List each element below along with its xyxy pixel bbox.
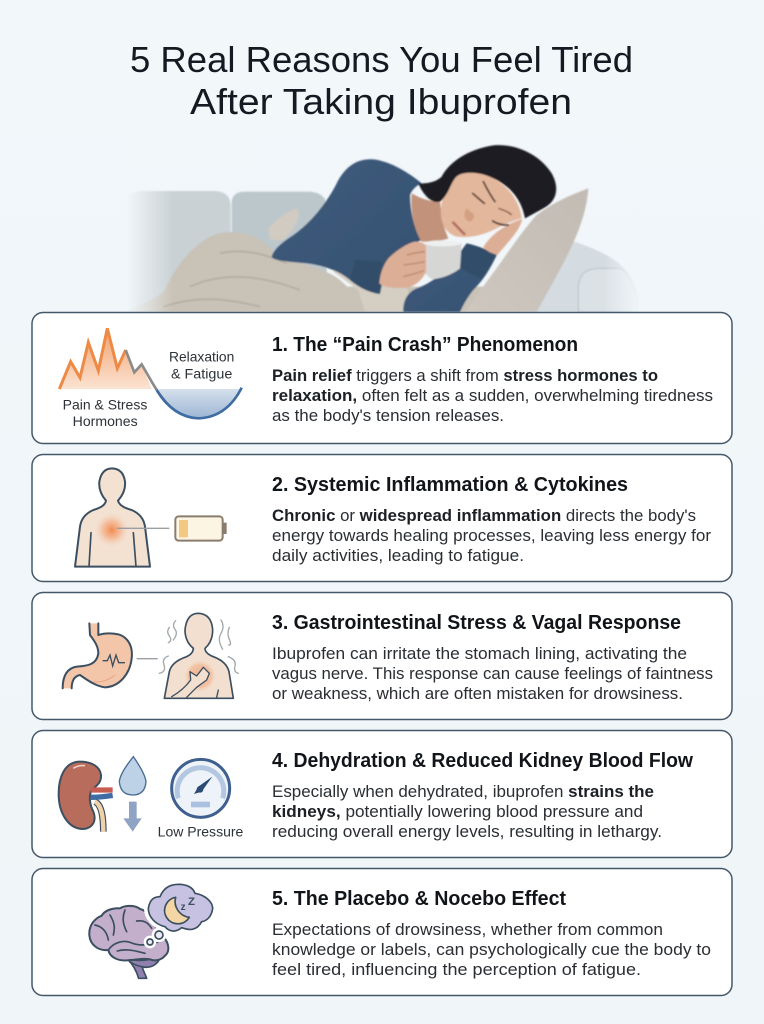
heading 2: 2. Systemic Inflammation & Cytokines [272,474,628,496]
body 3 [272,645,713,703]
icon: pain crash chart: & Fatigue [171,365,233,381]
icon: kidney, water drop, arrow and pressure gauge [59,757,244,840]
body 4: kidneys, potentially lowering blood pressure and [272,803,643,821]
body 5: knowledge or labels, can psychologically cue the body to [272,941,711,959]
icon: pain crash chart: Pain & Stress [63,396,147,412]
body 3: Ibuprofen can irritate the stomach lining, activating the [272,645,687,663]
title [130,39,633,122]
heading 4: 4. Dehydration & Reduced Kidney Blood Flow [272,750,693,772]
body 2 [272,507,712,565]
icon: pain crash chart [59,328,242,429]
title: After Taking Ibuprofen [190,81,572,122]
heading 3: 3. Gastrointestinal Stress & Vagal Response [272,612,681,634]
heading 5: 5. The Placebo & Nocebo Effect [272,888,566,910]
icon: brain with sleep thought bubble [89,884,213,978]
icon: kidney, water drop, arrow and pressure gauge: Low Pressure [158,824,244,840]
body 4: Especially when dehydrated, ibuprofen strains the [272,783,654,801]
body 5 [272,921,711,979]
icon: body with inflammation and low battery [75,468,227,567]
body 1: Pain relief triggers a shift from stress hormones to [272,367,658,385]
panel 1: pain crash [32,312,732,444]
body 1: relaxation, often felt as a sudden, overwhelming tiredness [272,387,713,405]
icon: brain with sleep thought bubble: z [181,902,186,913]
body 5: feel tired, influencing the perception of fatigue. [272,961,641,979]
icon: pain crash chart: Hormones [73,413,138,429]
heading 1: 1. The “Pain Crash” Phenomenon [272,334,578,356]
panel 3: gastrointestinal [32,592,732,720]
hero illustration: tired woman on sofa with mug [123,145,642,312]
body 4: reducing overall energy levels, resulting in lethargy. [272,823,662,841]
panel 2: inflammation [32,454,732,582]
body 1: as the body's tension releases. [272,407,504,425]
panel 4: dehydration and kidneys [32,730,732,858]
body 3: vagus nerve. This response can cause feelings of faintness [272,665,713,683]
body 3: or weakness, which are often mistaken for drowsiness. [272,685,683,703]
body 2: Chronic or widespread inflammation directs the body's [272,507,696,525]
icon: brain with sleep thought bubble: Z [188,896,195,908]
body 5: Expectations of drowsiness, whether from common [272,921,663,939]
body 2: energy towards healing processes, leaving less energy for [272,527,712,545]
body 1 [272,367,713,425]
body 4 [272,783,662,841]
title: 5 Real Reasons You Feel Tired [130,39,633,80]
icon: pain crash chart: Relaxation [169,349,234,365]
panel 5: placebo and nocebo [32,868,732,996]
icon: stomach and person with chest discomfort [63,613,238,698]
body 2: daily activities, leading to fatigue. [272,547,524,565]
